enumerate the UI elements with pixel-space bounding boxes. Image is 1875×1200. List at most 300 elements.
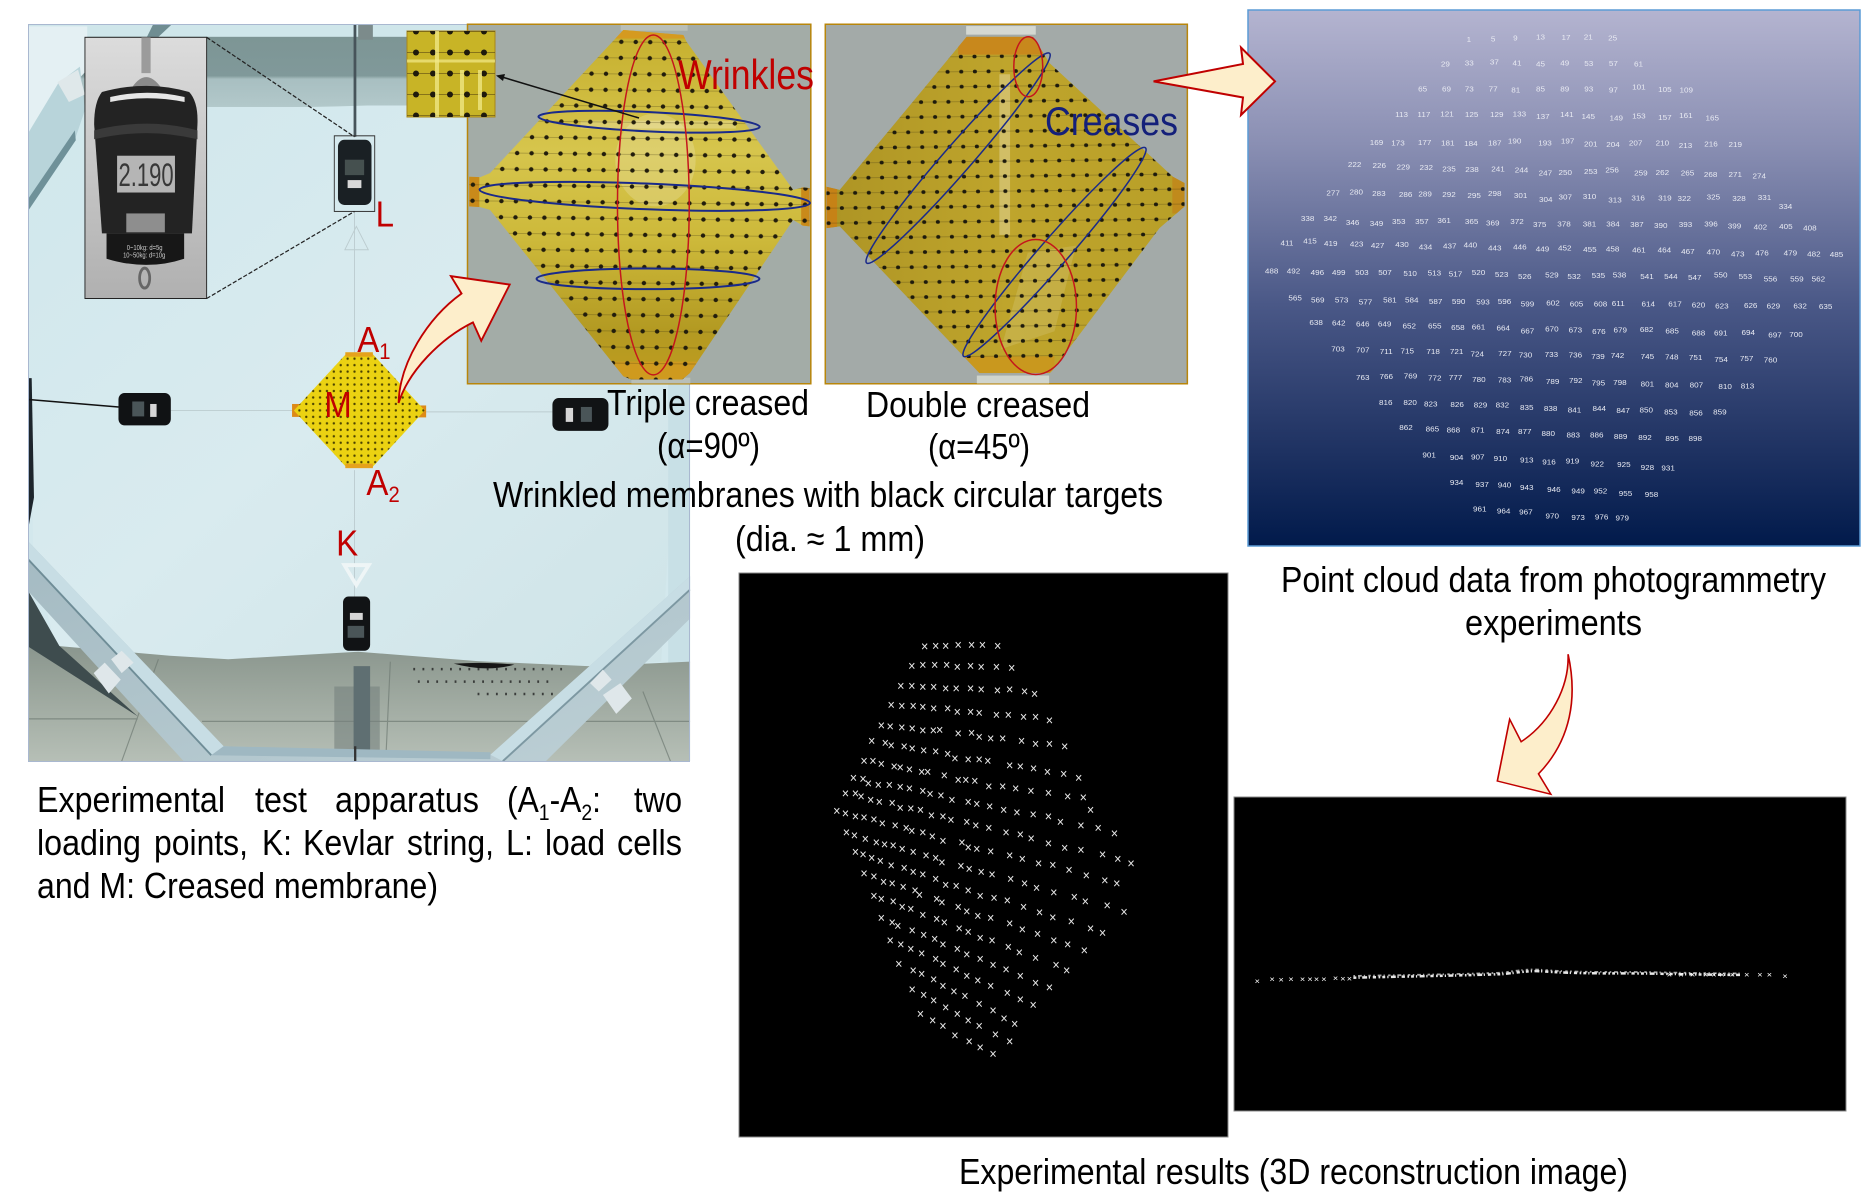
point labels: 177	[1418, 138, 1431, 147]
point labels: 670	[1545, 325, 1559, 333]
point labels: 65	[1418, 85, 1427, 93]
point labels: 117	[1417, 111, 1430, 119]
point labels: 204	[1606, 141, 1621, 149]
cross markers: ××××××××××××	[897, 678, 1038, 702]
load cell top with selection box	[334, 136, 375, 211]
point labels: 955	[1619, 489, 1632, 498]
point labels: 361	[1437, 217, 1451, 225]
point labels: 316	[1631, 194, 1645, 203]
point labels: 346	[1346, 218, 1359, 227]
point labels: 77	[1489, 85, 1498, 93]
point labels: 277	[1326, 189, 1340, 198]
point labels: 550	[1714, 271, 1727, 280]
inset: enlarged digital load cell: 2.190	[118, 156, 174, 193]
point labels: 892	[1638, 433, 1652, 442]
caption: experimental test apparatus: K:	[262, 822, 292, 863]
point labels: 658	[1451, 323, 1465, 332]
point labels: 141	[1560, 111, 1574, 119]
point labels: 73	[1465, 85, 1474, 93]
point labels: 859	[1713, 408, 1727, 416]
cross markers: ×××××××	[921, 637, 1001, 654]
point labels: 736	[1569, 351, 1582, 359]
curved arrow: apparatus to membranes	[399, 276, 510, 403]
point labels: 29	[1441, 60, 1450, 68]
cross markers: ××××××××××××××××××	[868, 733, 1082, 786]
point labels: 559	[1790, 275, 1804, 284]
point labels: 85	[1536, 85, 1545, 93]
point labels: 517	[1449, 270, 1462, 278]
point labels: 105	[1658, 86, 1672, 94]
point labels: 703	[1331, 345, 1345, 354]
point labels: 777	[1449, 373, 1462, 382]
point labels: 829	[1474, 401, 1487, 410]
point labels: 226	[1373, 162, 1386, 170]
floor tiles	[28, 592, 690, 761]
caption: triple creased: Triple creased	[607, 382, 809, 423]
point labels: 880	[1541, 430, 1555, 438]
point labels: 541	[1640, 272, 1654, 281]
point labels: 113	[1395, 111, 1408, 119]
point labels: 739	[1591, 353, 1605, 361]
point labels: 679	[1614, 326, 1627, 335]
point labels: 334	[1779, 203, 1793, 211]
point labels: 937	[1475, 480, 1489, 489]
point labels: 556	[1764, 275, 1777, 284]
panel: experimental test apparatus photo	[28, 25, 690, 765]
point labels: 581	[1383, 296, 1397, 305]
point labels: 430	[1395, 240, 1409, 249]
cross markers: ××××××××××××××××××××××××	[833, 803, 1120, 891]
heading: Creases: Creases	[1045, 100, 1178, 144]
point labels: 181	[1441, 139, 1455, 147]
point labels: 904	[1450, 453, 1464, 462]
label A1: A	[357, 321, 379, 361]
point labels: 889	[1614, 433, 1627, 441]
point labels: 593	[1476, 298, 1490, 306]
point labels: 623	[1715, 302, 1729, 310]
point labels: 646	[1356, 320, 1369, 329]
point labels: 853	[1664, 408, 1678, 416]
point labels: 801	[1641, 380, 1654, 388]
point labels: 298	[1488, 189, 1501, 198]
point labels: 850	[1639, 406, 1653, 415]
caption: experimental test apparatus: :	[592, 779, 601, 820]
point labels: 823	[1424, 400, 1438, 408]
load cell bottom	[343, 597, 370, 651]
point labels: 925	[1617, 460, 1631, 469]
leader dashes to enlarged scale	[207, 37, 355, 298]
point labels: 721	[1450, 348, 1463, 356]
point labels: 301	[1514, 191, 1527, 200]
label L: L	[376, 195, 394, 235]
point labels: 838	[1544, 404, 1557, 413]
point labels: 97	[1609, 86, 1618, 94]
point labels: 649	[1378, 320, 1391, 329]
point labels: 271	[1729, 171, 1742, 179]
caption: experimental test apparatus: apparatus	[335, 779, 479, 820]
point labels: 165	[1705, 114, 1719, 122]
point labels: 513	[1428, 269, 1441, 277]
point labels: 520	[1472, 269, 1485, 277]
point labels: 629	[1767, 302, 1780, 310]
point labels: 655	[1428, 322, 1442, 330]
point labels: 816	[1379, 398, 1393, 407]
cross markers: ×××××××	[917, 1006, 997, 1062]
point labels: 810	[1718, 382, 1732, 391]
point labels: 319	[1658, 194, 1672, 203]
point labels: 437	[1443, 242, 1457, 250]
point labels: 372	[1510, 218, 1524, 226]
point labels: 807	[1690, 381, 1703, 390]
point labels: 213	[1679, 141, 1692, 150]
point labels: 976	[1595, 513, 1608, 521]
point labels: 286	[1399, 191, 1412, 199]
point labels: 614	[1641, 300, 1656, 308]
point labels: 21	[1584, 33, 1593, 41]
point labels: 865	[1426, 425, 1439, 433]
point labels: 632	[1793, 302, 1807, 310]
arrow: point cloud to reconstruction	[1497, 654, 1572, 794]
label A1: 1	[379, 340, 391, 364]
point labels: 835	[1520, 403, 1533, 412]
point labels: 919	[1566, 457, 1579, 465]
point labels: 676	[1592, 328, 1606, 336]
point labels: 886	[1590, 431, 1604, 440]
point labels: 916	[1542, 458, 1556, 466]
point labels: 789	[1546, 377, 1559, 386]
point labels: 169	[1370, 138, 1383, 147]
caption: point cloud: experiments	[1465, 602, 1642, 643]
point labels: 535	[1592, 272, 1605, 280]
point labels: 37	[1490, 58, 1499, 66]
point labels: 700	[1789, 330, 1803, 339]
point labels: 569	[1311, 296, 1325, 304]
point labels: 844	[1592, 404, 1607, 413]
point labels: 832	[1496, 401, 1509, 409]
point labels: 757	[1740, 354, 1753, 363]
point labels: 197	[1561, 137, 1574, 145]
point labels: 898	[1688, 435, 1702, 443]
point labels: 292	[1442, 191, 1456, 199]
point labels: 369	[1486, 219, 1499, 227]
caption: double creased	[866, 384, 1090, 467]
point labels: 754	[1714, 355, 1729, 364]
heading: Wrinkles: Wrinkles	[678, 51, 814, 98]
red wrinkle ellipses	[995, 37, 1076, 374]
point labels: 396	[1704, 220, 1718, 228]
point labels: 419	[1324, 239, 1337, 248]
point labels: 153	[1632, 112, 1646, 120]
point labels: 101	[1632, 83, 1646, 91]
point labels: 718	[1426, 348, 1440, 356]
caption: triple creased: (α=90º)	[657, 425, 760, 466]
point labels: 443	[1488, 244, 1501, 252]
point labels: 590	[1452, 297, 1465, 306]
point labels: 402	[1754, 223, 1767, 231]
point labels: 193	[1538, 139, 1552, 148]
point labels: 187	[1488, 139, 1501, 147]
point labels: 384	[1606, 220, 1621, 228]
point labels: 25	[1608, 34, 1617, 43]
load cell left	[118, 393, 171, 425]
point labels: 652	[1403, 322, 1416, 330]
point labels: 393	[1679, 221, 1692, 229]
point labels: 813	[1741, 382, 1754, 390]
cross markers	[833, 637, 1135, 1062]
panel: triple creased membrane	[467, 24, 816, 384]
point labels: 325	[1707, 193, 1720, 201]
cross markers: ×××××××××××××××	[878, 910, 1053, 995]
point labels: 510	[1403, 269, 1417, 278]
point labels: 470	[1707, 248, 1720, 256]
point labels: 381	[1583, 220, 1596, 228]
cross markers: ××××××××××××××	[888, 697, 1053, 728]
cross markers: ×××××××××××××××××××	[860, 865, 1088, 958]
point labels: 238	[1465, 166, 1479, 174]
point labels: 93	[1584, 85, 1593, 93]
cross markers: ×××××××××××××××××××××	[852, 844, 1106, 941]
point labels: 667	[1521, 327, 1534, 335]
point labels: 9	[1513, 34, 1518, 43]
point labels: 423	[1350, 240, 1363, 248]
point labels: 81	[1511, 86, 1520, 94]
point labels: 322	[1678, 194, 1691, 203]
label K: K	[336, 525, 358, 564]
point labels: 664	[1496, 324, 1511, 332]
point labels: 390	[1654, 221, 1668, 230]
point labels: 427	[1371, 241, 1384, 250]
point labels: 365	[1465, 218, 1478, 226]
point labels: 408	[1803, 224, 1817, 232]
point labels: 411	[1281, 239, 1293, 247]
point labels: 342	[1324, 214, 1337, 223]
point labels: 250	[1558, 168, 1572, 177]
point labels: 5	[1491, 35, 1495, 43]
inset: enlarged digital load cell: 10~50kg: d=10g	[123, 251, 165, 260]
cross markers: ×××××××××	[908, 657, 1015, 676]
point labels: 573	[1335, 296, 1348, 305]
point labels: 958	[1645, 490, 1658, 499]
point labels: 313	[1608, 196, 1622, 204]
point labels: 219	[1729, 141, 1742, 149]
cross markers: ××××××××××××××××	[878, 717, 1068, 754]
point labels: 173	[1391, 139, 1405, 148]
point labels: 49	[1560, 59, 1569, 67]
arrow: membranes to point cloud	[1154, 48, 1275, 115]
side-view point strip: ××××××××××××××××××××××	[1255, 970, 1788, 986]
point labels: 661	[1472, 323, 1485, 331]
point labels: 940	[1498, 481, 1511, 490]
point labels: 795	[1592, 379, 1605, 387]
point labels: 946	[1547, 485, 1561, 494]
white hanging cloth	[316, 106, 406, 107]
point labels: 256	[1605, 166, 1619, 174]
point labels: 611	[1612, 299, 1625, 308]
point labels: 149	[1609, 114, 1623, 122]
label M: M	[324, 386, 352, 425]
caption: experimental test apparatus: load	[545, 822, 605, 863]
point labels: 133	[1513, 110, 1526, 118]
point labels: 387	[1630, 221, 1644, 229]
point labels: 222	[1348, 161, 1361, 169]
point labels: 57	[1609, 59, 1618, 68]
caption: experimental test apparatus: 2	[581, 800, 592, 825]
point labels: 45	[1536, 60, 1545, 68]
point labels: 711	[1380, 347, 1393, 356]
point labels: 145	[1582, 112, 1595, 121]
point labels: 274	[1752, 172, 1767, 180]
inset: enlarged digital load cell: 0~10kg: d=5g	[127, 244, 163, 252]
point labels: 694	[1742, 329, 1756, 337]
point labels: 682	[1640, 325, 1653, 334]
caption: wrinkled membranes: Wrinkled membranes with black circular targets	[493, 474, 1163, 515]
point labels: 970	[1546, 512, 1559, 521]
point labels: 786	[1520, 375, 1533, 384]
point labels: 129	[1490, 111, 1504, 119]
point labels: 464	[1658, 246, 1672, 254]
point labels: 268	[1704, 171, 1717, 179]
point labels: 638	[1309, 318, 1323, 327]
caption: experimental test apparatus: points,	[154, 822, 248, 863]
point labels: 922	[1590, 460, 1604, 468]
point labels: 378	[1557, 220, 1571, 228]
point labels: 760	[1764, 356, 1777, 364]
point labels: 895	[1665, 435, 1679, 443]
point labels: 157	[1658, 113, 1672, 122]
point labels: 883	[1567, 431, 1580, 440]
point labels: 856	[1689, 409, 1703, 417]
point labels: 458	[1606, 245, 1619, 254]
point labels: 455	[1583, 245, 1597, 254]
point labels: 715	[1401, 347, 1414, 355]
point labels: 952	[1594, 487, 1607, 495]
point labels: 826	[1450, 400, 1464, 409]
red wrinkle ellipse	[617, 35, 689, 375]
point labels: 973	[1571, 513, 1585, 522]
label A2: 2	[388, 483, 400, 507]
point labels: 871	[1471, 426, 1484, 435]
point labels: 33	[1465, 59, 1474, 68]
point labels: 979	[1616, 514, 1629, 522]
membrane body with targets	[467, 24, 816, 384]
point labels: 798	[1613, 378, 1627, 387]
caption: wrinkled membranes	[493, 474, 1163, 559]
point labels: 161	[1679, 112, 1693, 120]
point labels: 877	[1518, 428, 1531, 436]
point labels: 452	[1558, 244, 1572, 252]
point labels: 617	[1668, 300, 1682, 308]
centre post and shadow	[334, 687, 380, 751]
point labels: 353	[1392, 218, 1406, 226]
point labels: 529	[1545, 271, 1559, 279]
point labels: 232	[1420, 163, 1433, 172]
point labels: 742	[1611, 352, 1624, 360]
point labels: 751	[1689, 353, 1702, 362]
point labels: 492	[1287, 267, 1300, 275]
point labels: 642	[1332, 319, 1346, 327]
point labels: 338	[1301, 214, 1314, 223]
point labels: 216	[1704, 140, 1718, 148]
point labels: 943	[1520, 483, 1533, 492]
point labels: 415	[1303, 237, 1317, 245]
point labels: 357	[1415, 218, 1429, 226]
point labels: 772	[1428, 374, 1442, 382]
point labels: 434	[1419, 243, 1433, 251]
point labels: 53	[1584, 59, 1593, 68]
blue crease ellipses	[478, 107, 811, 289]
point labels: 440	[1464, 241, 1477, 249]
point labels: 121	[1440, 110, 1454, 118]
point labels: 820	[1403, 398, 1417, 407]
point labels: 727	[1498, 349, 1512, 358]
point labels: 673	[1569, 326, 1582, 335]
point labels: 137	[1536, 113, 1550, 121]
point labels: 375	[1533, 221, 1546, 229]
panel: 3D reconstruction top view	[739, 573, 1228, 1137]
point labels: 931	[1661, 464, 1675, 472]
caption: experimental test apparatus: L:	[506, 822, 533, 863]
cross markers: ×××××××××××	[895, 956, 1018, 1032]
point labels: 503	[1355, 268, 1369, 277]
caption: double creased: (α=45º)	[928, 426, 1030, 467]
caption: experimental test apparatus: -A	[550, 779, 581, 820]
point labels: 934	[1450, 478, 1464, 487]
small creased membrane M	[292, 352, 426, 468]
scattered black debris	[454, 663, 514, 668]
cross markers: ×××××××××××××	[887, 932, 1037, 1013]
point labels: 967	[1519, 508, 1533, 516]
point labels: 61	[1634, 60, 1643, 68]
point labels: 244	[1515, 166, 1529, 174]
point labels: 724	[1471, 350, 1485, 358]
point labels: 310	[1583, 193, 1596, 201]
panel: point cloud data	[1248, 10, 1860, 546]
point labels: 283	[1372, 189, 1386, 198]
point labels: 577	[1359, 298, 1372, 306]
point labels: 280	[1349, 188, 1363, 196]
point labels: 707	[1356, 346, 1369, 355]
point labels: 331	[1758, 193, 1771, 202]
point labels: 745	[1641, 352, 1654, 361]
point labels: 13	[1536, 33, 1545, 41]
point labels: 210	[1656, 139, 1669, 148]
caption: double creased: Double creased	[866, 384, 1090, 425]
point labels: 262	[1656, 168, 1669, 177]
point labels: 482	[1807, 250, 1821, 258]
load cell right	[552, 398, 608, 431]
blue crease ellipses	[853, 48, 1159, 362]
point labels: 868	[1447, 426, 1460, 435]
point labels: 190	[1508, 137, 1521, 145]
caption: experimental test apparatus: 1	[539, 800, 550, 825]
point labels: 399	[1728, 222, 1741, 230]
point labels: 596	[1498, 297, 1511, 306]
point labels: 620	[1692, 301, 1705, 309]
caption: point cloud: Point cloud data from photogrammetry	[1281, 559, 1826, 600]
point labels: 602	[1546, 299, 1560, 307]
point labels: 304	[1539, 196, 1553, 204]
point labels: 949	[1571, 487, 1585, 495]
point labels: 328	[1732, 194, 1746, 203]
point labels: 804	[1665, 381, 1679, 389]
point labels: 847	[1616, 407, 1630, 415]
point labels: 874	[1496, 428, 1510, 436]
caption: wrinkled membranes: (dia. ≈ 1 mm)	[735, 518, 925, 559]
point labels: 259	[1634, 169, 1648, 178]
point labels: 730	[1519, 351, 1532, 359]
point labels: 685	[1665, 327, 1679, 335]
point labels: 608	[1594, 300, 1607, 308]
